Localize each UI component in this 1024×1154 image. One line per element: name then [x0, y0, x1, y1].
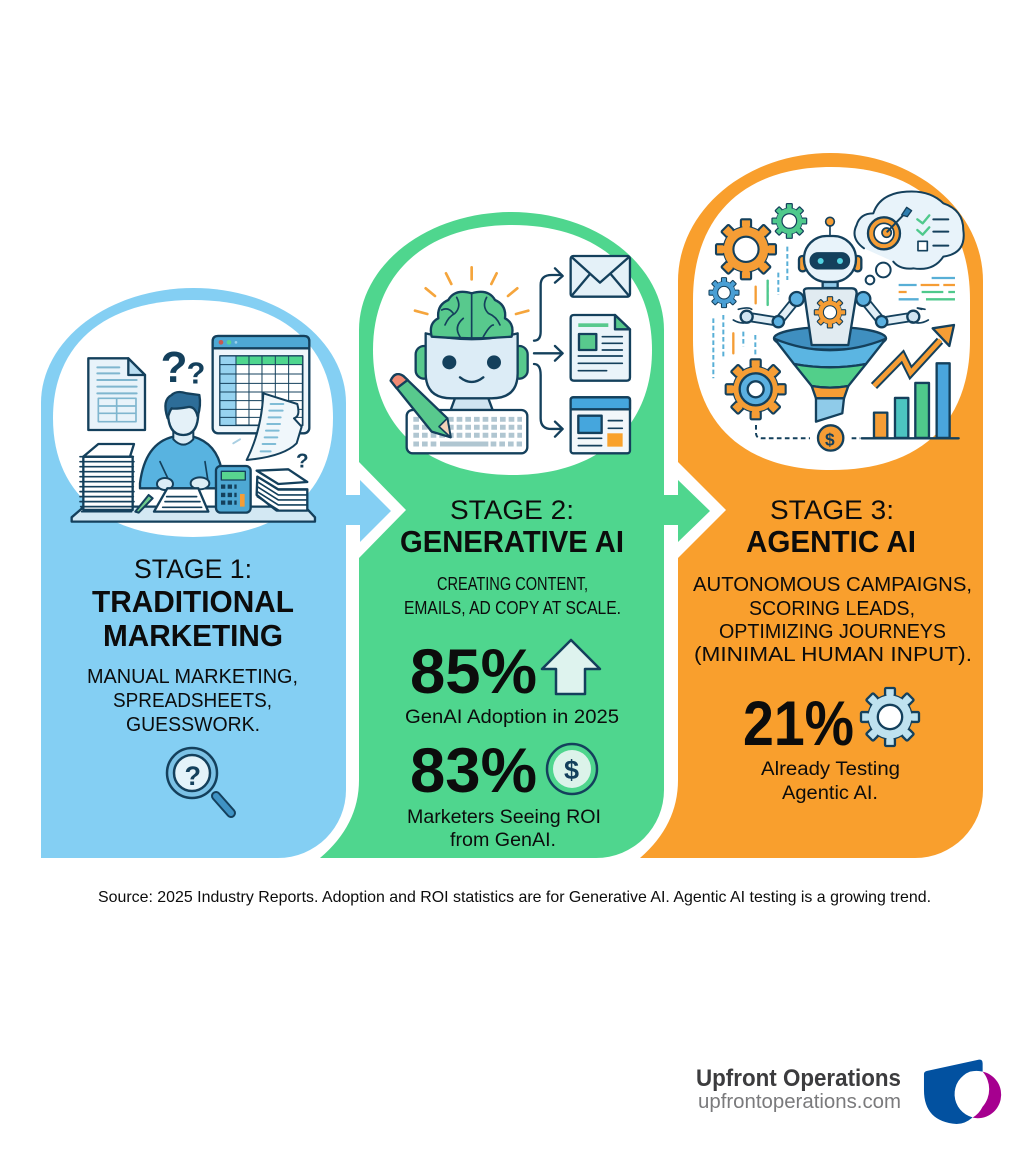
heading: marketing: MARKETING	[103, 618, 283, 653]
text: stage 3 description: SCORING LEADS,	[749, 598, 915, 620]
source note: Source: 2025 Industry Reports. Adoption and ROI statistics are for Generative AI. Agentic AI testing is a growing trend.	[98, 889, 931, 906]
logo wordmark: upfrontoperations.com	[698, 1091, 901, 1113]
icon: robot in marketing funnel with gears and charts: $	[825, 429, 835, 449]
text: stage 2 description	[404, 574, 621, 618]
stat: 85 percent: 85%	[410, 637, 537, 707]
icon: robot with brain writing content	[391, 256, 630, 453]
label: already testing agentic AI: Agentic AI.	[782, 783, 878, 804]
label: already testing agentic AI	[761, 759, 900, 804]
icon: magnifying glass with question mark	[167, 748, 231, 813]
panel: stage 2 generative AI	[320, 212, 664, 858]
panel: stage 1 traditional marketing	[41, 288, 346, 858]
icon: robot in marketing funnel with gears and charts	[709, 191, 964, 451]
text: stage 3 description: AUTONOMOUS CAMPAIGNS,	[693, 574, 972, 596]
heading: agentic AI: AGENTIC AI	[746, 524, 916, 559]
heading: stage 3: STAGE 3:	[770, 495, 894, 525]
label: marketers seeing ROI: from GenAI.	[450, 830, 556, 851]
panel: stage 3 agentic AI	[640, 153, 983, 858]
icon: magnifying glass with question mark: ?	[184, 761, 201, 791]
label: marketers seeing ROI	[407, 807, 601, 851]
icon: dollar coin	[547, 744, 597, 794]
heading: generative AI: GENERATIVE AI	[400, 524, 624, 559]
logo mark	[924, 1060, 1001, 1124]
label: already testing agentic AI: Already Testing	[761, 759, 900, 780]
text: stage 3 description: OPTIMIZING JOURNEYS	[719, 621, 946, 643]
arrow: stage 1 to stage 2	[346, 462, 406, 558]
stat: 21 percent: 21%	[743, 689, 854, 759]
text: stage 3 description: (MINIMAL HUMAN INPUT).	[694, 644, 972, 666]
icon: person at desk with spreadsheets	[72, 336, 315, 522]
icon: person at desk with spreadsheets: ?	[296, 449, 309, 472]
icon: person at desk with spreadsheets: ?	[161, 343, 188, 392]
text: stage 3 description	[693, 574, 972, 666]
arrow: stage 2 to stage 3	[664, 462, 726, 558]
text: stage 1 description: GUESSWORK.	[126, 714, 260, 736]
icon: up arrow	[542, 640, 600, 694]
logo wordmark: Upfront Operations	[696, 1065, 901, 1092]
heading: stage 2: STAGE 2:	[450, 495, 574, 525]
heading: stage 1: STAGE 1:	[134, 554, 252, 584]
icon: gear	[861, 688, 919, 746]
text: stage 2 description: EMAILS, AD COPY AT SCALE.	[404, 598, 621, 618]
label: GenAI adoption: GenAI Adoption in 2025	[405, 707, 619, 728]
text: stage 1 description	[87, 666, 298, 736]
logo wordmark	[696, 1065, 901, 1113]
stat: 83 percent: 83%	[410, 736, 537, 806]
heading: traditional: TRADITIONAL	[92, 584, 294, 619]
text: stage 2 description: CREATING CONTENT,	[437, 574, 588, 594]
label: marketers seeing ROI: Marketers Seeing ROI	[407, 807, 601, 828]
icon: dollar coin: $	[564, 755, 579, 785]
icon: person at desk with spreadsheets: ?	[187, 356, 205, 390]
text: stage 1 description: MANUAL MARKETING,	[87, 666, 298, 688]
text: stage 1 description: SPREADSHEETS,	[113, 690, 272, 712]
